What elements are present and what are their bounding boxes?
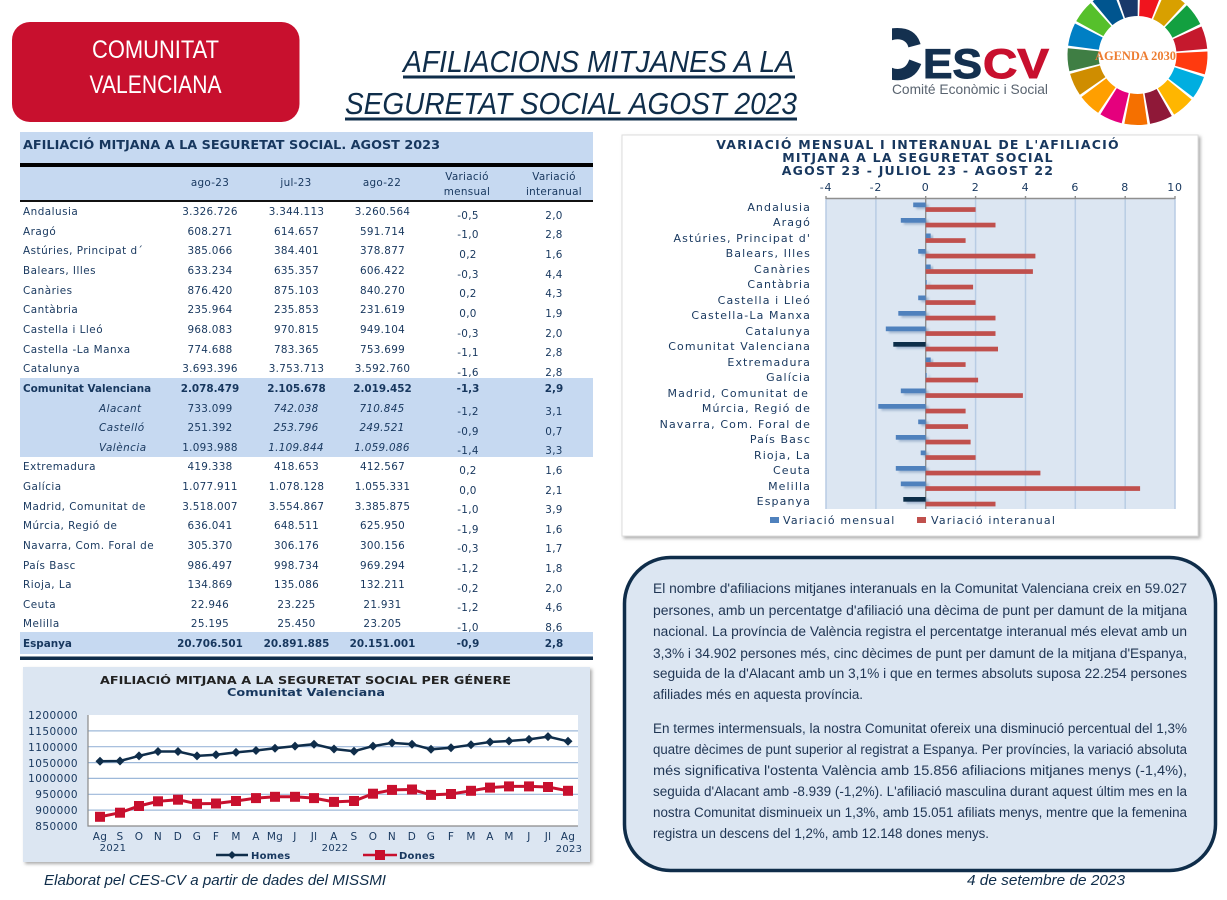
table column variació interanual: 2,8 [545, 367, 563, 379]
table column ago-22: 1.059.086 [354, 442, 410, 454]
category labels: Aragó [773, 216, 811, 229]
x axis labels: J [292, 831, 297, 843]
table column variació interanual [545, 210, 563, 650]
paragraph 2: quatre dècimes de punt superior al registrat a Espanya. Per províncies, la variació absoluta [653, 742, 1187, 757]
axis labels: -2 [870, 181, 882, 194]
table column variació interanual: 2,0 [545, 328, 563, 340]
table header: Variació [445, 171, 489, 183]
table column ago-23: 774.688 [187, 344, 233, 356]
paragraph 1: 3,3% i 34.902 persones més, cinc dècimes de punt per damunt de la mitjana d'Espanya, [653, 646, 1187, 661]
table column ago-22: 840.270 [360, 285, 405, 297]
x axis labels: Ag [561, 831, 575, 843]
category labels: Extremadura [727, 356, 811, 369]
legend [216, 850, 435, 862]
x axis labels: G [427, 831, 435, 843]
panel: text commentary [624, 558, 1216, 870]
x axis labels: 2022 [322, 843, 348, 854]
table column variació interanual: 0,7 [545, 426, 563, 438]
category labels: Múrcia, Regió de [702, 402, 811, 415]
table column variació mensual: -0,3 [457, 269, 479, 281]
table column variació interanual: 3,1 [545, 406, 563, 418]
table column variació mensual: -1,2 [457, 602, 479, 614]
x axis labels: M [504, 831, 514, 843]
table column jul-23: 25.450 [277, 618, 316, 630]
x axis labels: F [213, 831, 219, 843]
table column ago-22: 249.521 [359, 422, 405, 434]
category labels: Comunitat Valenciana [668, 340, 811, 353]
paragraph 2: En termes intermensuals, la nostra Comunitat ofereix una disminució percentual del 1,3% [653, 721, 1187, 736]
table column variació mensual: -1,0 [457, 504, 479, 516]
y axis labels: 1100000 [28, 742, 78, 754]
table row labels: Cantàbria [23, 304, 78, 316]
chart title: VARIACIÓ MENSUAL I INTERANUAL DE L'AFILIACIÓ [716, 137, 1120, 152]
table row labels: Navarra, Com. Foral de [23, 540, 154, 552]
plot area [88, 715, 578, 826]
panel: bar chart variació mensual i interanual [622, 135, 1198, 536]
paragraph 1: afiliades més en aquesta província. [653, 687, 863, 702]
table column variació mensual [457, 210, 479, 650]
table row labels: Catalunya [23, 363, 80, 375]
table column ago-22: 969.294 [360, 560, 405, 572]
table column jul-23: 135.086 [274, 579, 319, 591]
legend: Dones [399, 851, 435, 862]
table column ago-22: 753.699 [360, 344, 405, 356]
paragraph 2: nostra Comunitat disminueix un 1,3%, amb 15.051 afiliats menys, mentre que la femenina [653, 805, 1187, 820]
table column variació interanual: 2,0 [545, 583, 563, 595]
x axis labels: M [231, 831, 241, 843]
table column variació mensual: -1,0 [457, 622, 479, 634]
table title: AFILIACIÓ MITJANA A LA SEGURETAT SOCIAL. AGOST 2023 [23, 137, 440, 152]
logo: CES-CV: ES [923, 40, 982, 87]
table column variació mensual: 0,2 [459, 288, 477, 300]
x axis labels: Jl [310, 831, 317, 843]
plot area [826, 196, 1175, 509]
table column jul-23: 20.891.885 [264, 638, 329, 650]
table column variació interanual: 1,6 [545, 249, 563, 261]
logo: CES-CV: C [871, 16, 921, 93]
badge: Comunitat Valenciana [12, 22, 300, 122]
table row labels: Rioja, La [23, 579, 72, 591]
line: Homes [100, 737, 568, 761]
x axis labels: D [174, 831, 182, 843]
table column ago-22: 949.104 [360, 324, 405, 336]
panel: line chart per gènere [23, 667, 590, 862]
table column variació mensual: -1,9 [457, 524, 479, 536]
table column variació mensual: -1,0 [457, 229, 479, 241]
axis labels: 8 [1121, 181, 1129, 194]
badge: Comunitat Valenciana: VALENCIANA [90, 71, 222, 99]
y axis labels: 1050000 [28, 758, 78, 770]
axis labels: -4 [820, 181, 832, 194]
category labels: Ceuta [773, 464, 811, 477]
x axis labels: Ag [93, 831, 107, 843]
axis labels: 6 [1071, 181, 1079, 194]
table row labels: Galícia [23, 481, 62, 493]
table column ago-23: 22.946 [191, 599, 229, 611]
table column ago-22: 606.422 [360, 265, 405, 277]
table column ago-22: 23.205 [363, 618, 402, 630]
table column jul-23: 970.815 [274, 324, 319, 336]
table column jul-23: 783.365 [274, 344, 319, 356]
table column variació interanual: 3,9 [545, 504, 563, 516]
category labels: Catalunya [745, 325, 811, 338]
table column variació interanual: 4,6 [545, 602, 563, 614]
category labels: Melilla [768, 480, 811, 493]
x axis labels: M [466, 831, 476, 843]
table header: jul-23 [279, 177, 312, 189]
table column variació mensual: -0,3 [457, 543, 479, 555]
table column variació mensual: -1,2 [457, 563, 479, 575]
table column variació mensual: -0,9 [457, 638, 479, 650]
category labels: Cantàbria [747, 278, 811, 291]
table header: ago-22 [363, 177, 401, 189]
axis labels: 2 [972, 181, 980, 194]
table column ago-23: 876.420 [187, 285, 233, 297]
table column variació interanual: 1,9 [545, 308, 563, 320]
table column ago-22: 132.211 [360, 579, 405, 591]
table row labels: Alacant [98, 403, 142, 415]
category labels: Castella-La Manxa [691, 309, 811, 322]
table column ago-23: 633.234 [187, 265, 233, 277]
title [345, 44, 797, 121]
table column jul-23: 1.109.844 [268, 442, 324, 454]
logo: CES-CV: CV [983, 40, 1049, 87]
y axis labels: 1200000 [28, 710, 78, 722]
table row labels: Ceuta [23, 599, 56, 611]
badge: Comunitat Valenciana: COMUNITAT [92, 36, 219, 64]
table column jul-23: 614.657 [274, 226, 319, 238]
table column ago-22: 3.385.875 [355, 501, 410, 513]
table row labels: València [99, 442, 147, 454]
paragraph 1: seguida de la d'Alacant amb un 3,1% i que en termes absoluts suposa 22.254 persones [653, 666, 1187, 681]
paragraph 2 [653, 721, 1187, 841]
category labels: Rioja, La [754, 449, 811, 462]
table column ago-23 [177, 206, 243, 650]
table column jul-23: 3.554.867 [269, 501, 324, 513]
table column ago-23: 3.693.396 [182, 363, 238, 375]
table column variació mensual: -1,1 [457, 347, 479, 359]
table row labels: Madrid, Comunitat de [23, 501, 146, 513]
y axis labels: 1000000 [28, 773, 78, 785]
table column ago-23: 968.083 [187, 324, 233, 336]
table column variació mensual: 0,2 [459, 465, 477, 477]
table column variació interanual: 1,6 [545, 524, 563, 536]
table column ago-23: 1.077.911 [182, 481, 238, 493]
table column ago-22: 21.931 [363, 599, 402, 611]
paragraph 1: persones, amb un percentatge d'afiliació una dècima de punt per damunt de la mitjana [653, 603, 1188, 618]
category labels: Andalusia [747, 201, 811, 214]
table column ago-23: 3.518.007 [182, 501, 238, 513]
category labels: Galícia [766, 371, 811, 384]
table column variació mensual: 0,0 [459, 308, 477, 320]
table column ago-23: 25.195 [191, 618, 229, 630]
title: AFILIACIONS MITJANES A LA [401, 44, 794, 79]
table column variació mensual: 0,0 [459, 485, 477, 497]
table column variació mensual: 0,2 [459, 249, 477, 261]
table row labels: Castella i Lleó [23, 324, 103, 336]
table header [191, 171, 582, 198]
category labels [660, 201, 811, 508]
table column ago-22: 2.019.452 [353, 383, 412, 395]
x axis labels: J [526, 831, 531, 843]
table column variació interanual: 2,8 [545, 229, 563, 241]
category labels: Castella i Lleó [718, 294, 811, 307]
table column ago-22: 3.260.564 [355, 206, 410, 218]
table column jul-23: 1.078.128 [269, 481, 324, 493]
x axis labels: Mg [267, 831, 283, 843]
x axis labels: Jl [544, 831, 551, 843]
chart title: MITJANA A LA SEGURETAT SOCIAL [782, 150, 1054, 165]
table column ago-22: 710.845 [359, 403, 405, 415]
table column ago-23: 3.326.726 [182, 206, 238, 218]
table column variació interanual: 1,8 [545, 563, 563, 575]
table column jul-23: 742.038 [273, 403, 319, 415]
table column ago-22: 231.619 [360, 304, 405, 316]
x axis labels: F [448, 831, 454, 843]
table column ago-22: 625.950 [360, 520, 405, 532]
table row labels: Andalusia [23, 206, 78, 218]
table column variació mensual: -1,4 [457, 445, 479, 457]
table row labels: Comunitat Valenciana [23, 383, 151, 395]
x axis labels: 2023 [556, 844, 582, 855]
x axis labels: D [408, 831, 416, 843]
table column jul-23: 648.511 [274, 520, 319, 532]
table column variació interanual: 4,4 [545, 269, 563, 281]
table row labels: Astúries, Principat d´ [23, 245, 143, 257]
x axis labels: A [252, 831, 260, 843]
table column ago-23: 2.078.479 [181, 383, 239, 395]
table column ago-22: 1.055.331 [355, 481, 410, 493]
y axis labels: 850000 [35, 821, 78, 833]
table row labels: Aragó [23, 226, 56, 238]
table column ago-23: 251.392 [187, 422, 233, 434]
table column ago-22: 20.151.001 [350, 638, 415, 650]
x axis labels: A [486, 831, 494, 843]
axis labels: 4 [1022, 181, 1029, 194]
category labels: Canàries [754, 263, 811, 276]
table column ago-23: 134.869 [187, 579, 233, 591]
table column variació mensual: -0,9 [457, 426, 479, 438]
table header: mensual [444, 186, 490, 198]
table column variació interanual: 1,6 [545, 465, 563, 477]
table row labels: Extremadura [23, 461, 96, 473]
table column ago-23: 733.099 [187, 403, 233, 415]
table column variació mensual: -1,3 [457, 383, 479, 395]
table column variació interanual: 2,0 [545, 210, 563, 222]
logo: CES-CV [892, 28, 1050, 94]
x axis labels: O [369, 831, 377, 843]
x axis labels: A [330, 831, 338, 843]
table column ago-22: 591.714 [360, 226, 405, 238]
table row labels: País Basc [23, 560, 76, 572]
table column variació mensual: -0,5 [457, 210, 479, 222]
x axis labels: S [351, 831, 358, 843]
title: SEGURETAT SOCIAL AGOST 2023 [345, 86, 797, 121]
source note: Elaborat pel CES-CV a partir de dades del MISSMI [44, 872, 386, 889]
icon: Agenda 2030 wheel [1060, 0, 1215, 132]
line: Dones [100, 786, 568, 817]
paragraph 1: El nombre d'afiliacions mitjanes interanuals en la Comunitat Valenciana creix en 59.027 [653, 581, 1187, 596]
logo: CES-CV: Comité Econòmic i Social [892, 81, 1048, 97]
category labels: Astúries, Principat d' [674, 232, 811, 245]
table column ago-23: 419.338 [187, 461, 233, 473]
paragraph 1: nacional. La província de València registra el percentatge interanual més elevat amb un [653, 624, 1187, 639]
table column jul-23: 253.796 [273, 422, 319, 434]
paragraph 2: seguida d'Alacant amb -8.939 (-1,2%). L'afiliació masculina durant aquest últim mes en la [653, 784, 1187, 799]
bars: variació interanual [926, 207, 1140, 506]
table header: interanual [526, 186, 582, 198]
table column variació interanual: 2,8 [545, 347, 563, 359]
category labels: País Basc [750, 433, 811, 446]
table column ago-23: 608.271 [187, 226, 233, 238]
table column ago-22 [350, 206, 415, 650]
table header: ago-23 [191, 177, 229, 189]
table column variació mensual: -1,2 [457, 406, 479, 418]
paragraph 2: més significativa l'ostenta València amb 15.856 afiliacions mitjanes menys (-1,4%), [653, 763, 1187, 778]
table column jul-23 [264, 206, 329, 650]
table column variació interanual: 2,1 [545, 485, 563, 497]
paragraph 1 [653, 581, 1188, 702]
x axis labels: G [193, 831, 201, 843]
table row labels: Castella -La Manxa [23, 344, 131, 356]
table column jul-23: 3.344.113 [269, 206, 324, 218]
table header: Variació [532, 171, 576, 183]
table column ago-23: 235.964 [187, 304, 233, 316]
axis labels [820, 181, 1183, 194]
legend [770, 514, 1056, 527]
y axis labels: 950000 [35, 789, 78, 801]
table column ago-23: 20.706.501 [177, 638, 243, 650]
category labels: Balears, Illes [726, 247, 811, 260]
table column jul-23: 875.103 [274, 285, 319, 297]
date: 4 de setembre de 2023 [967, 872, 1126, 889]
category labels: Madrid, Comunitat de [667, 387, 809, 400]
axis labels: 0 [922, 181, 930, 194]
bars: variació mensual [878, 202, 931, 502]
table column ago-23: 636.041 [187, 520, 233, 532]
table column ago-22: 412.567 [360, 461, 405, 473]
table column variació interanual: 2,9 [545, 383, 563, 395]
table column variació mensual: -0,3 [457, 328, 479, 340]
table column jul-23: 998.734 [274, 560, 319, 572]
table column variació interanual: 4,3 [545, 288, 563, 300]
category labels: Navarra, Com. Foral de [660, 418, 811, 431]
table column variació mensual: -0,2 [457, 583, 479, 595]
y axis labels: 1150000 [28, 726, 78, 738]
x axis labels: S [117, 831, 124, 843]
table column jul-23: 3.753.713 [269, 363, 324, 375]
table column variació interanual: 2,8 [545, 638, 563, 650]
table column ago-23: 385.066 [187, 245, 233, 257]
paragraph 2: registra un descens del 1,2%, amb 12.148 dones menys. [653, 826, 989, 841]
table row labels: Espanya [23, 638, 72, 650]
table row labels [23, 206, 154, 650]
table column ago-22: 3.592.760 [355, 363, 410, 375]
table column jul-23: 635.357 [274, 265, 319, 277]
chart title: AFILIACIÓ MITJANA A LA SEGURETAT SOCIAL PER GÉNERE [100, 674, 511, 687]
table column ago-23: 305.370 [187, 540, 233, 552]
chart title [716, 137, 1120, 178]
x axis labels [93, 831, 582, 855]
legend: Homes [251, 851, 290, 862]
table row labels: Múrcia, Regió de [23, 520, 117, 532]
x axis labels: O [135, 831, 143, 843]
chart title: Comunitat Valenciana [227, 686, 385, 699]
category labels: Espanya [757, 495, 811, 508]
legend: Variació interanual [931, 514, 1056, 527]
y axis labels: 900000 [35, 805, 78, 817]
legend: Variació mensual [783, 514, 895, 527]
table column jul-23: 384.401 [274, 245, 319, 257]
x axis labels: N [388, 831, 396, 843]
icon: Agenda 2030 wheel: AGENDA 2030 [1095, 49, 1176, 63]
table row labels: Balears, Illes [23, 265, 96, 277]
panel: data table [20, 132, 593, 660]
table column ago-23: 986.497 [187, 560, 233, 572]
y axis labels [28, 710, 78, 833]
table column variació mensual: -1,6 [457, 367, 479, 379]
table row labels: Castelló [99, 422, 145, 434]
table column variació interanual: 1,7 [545, 543, 563, 555]
table column jul-23: 418.653 [274, 461, 319, 473]
chart title [100, 674, 511, 699]
chart title: AGOST 23 - JULIOL 23 - AGOST 22 [782, 163, 1054, 178]
table column jul-23: 2.105.678 [267, 383, 326, 395]
axis labels: 10 [1167, 181, 1183, 194]
table column jul-23: 306.176 [274, 540, 319, 552]
x axis labels: 2021 [100, 843, 126, 854]
table column ago-23: 1.093.988 [182, 442, 238, 454]
table column jul-23: 235.853 [274, 304, 319, 316]
x axis labels: N [154, 831, 162, 843]
table row labels: Canàries [23, 285, 73, 297]
table column ago-22: 300.156 [360, 540, 405, 552]
table column variació interanual: 3,3 [545, 445, 563, 457]
table row labels: Melilla [23, 618, 60, 630]
table column variació interanual: 8,6 [545, 622, 563, 634]
table column ago-22: 378.877 [360, 245, 405, 257]
table column jul-23: 23.225 [277, 599, 316, 611]
